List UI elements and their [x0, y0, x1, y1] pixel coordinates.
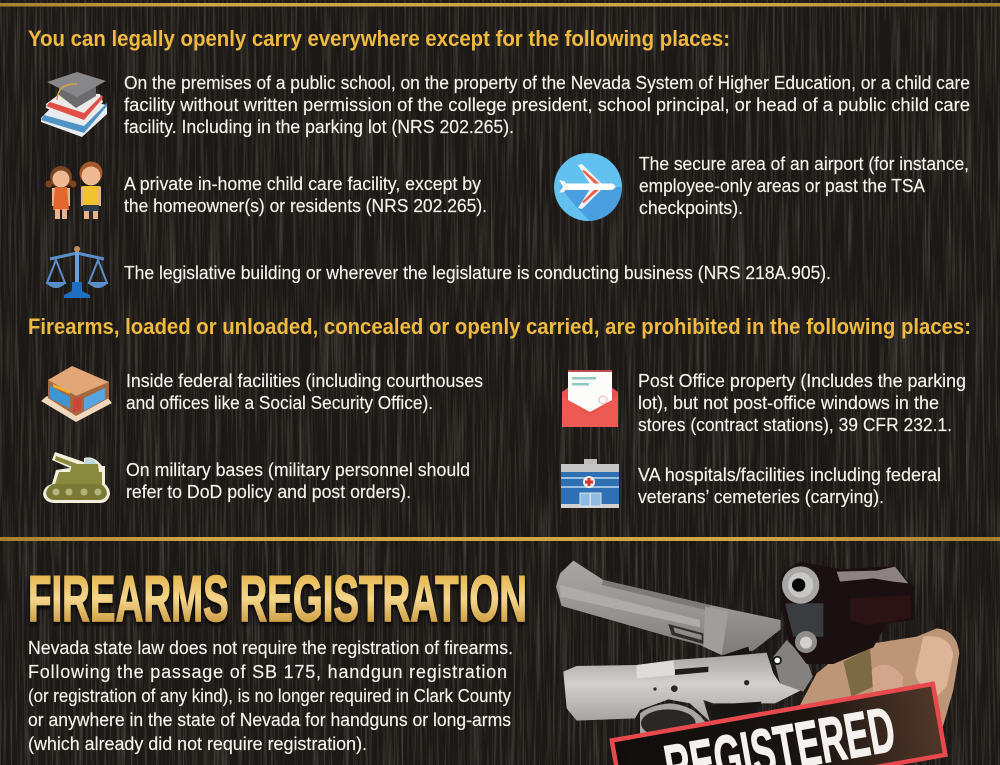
registered stamp [612, 684, 946, 765]
heading: open carry exceptions: You can legally openly carry everywhere except for the following places: [28, 26, 730, 51]
child care text: A private in-home child care facility, except by [124, 174, 481, 194]
federal facilities text [126, 371, 483, 413]
icon: tank [43, 452, 110, 503]
legislature text: The legislative building or wherever the legislature is conducting business (NRS 218A.905). [124, 263, 831, 283]
VA hospitals text [638, 465, 941, 507]
airport text: employee-only areas or past the TSA [639, 176, 925, 196]
finger and trigger guard [843, 648, 873, 697]
school text: On the premises of a public school, on the property of the Nevada System of Higher Education, or a child care [124, 73, 970, 93]
illustration: handguns with registered stamp [556, 561, 959, 765]
section gold divider [0, 537, 1000, 541]
airport text [639, 154, 969, 218]
icon: blue scales [46, 246, 108, 298]
post office text: stores (contract stations), 39 CFR 232.1. [638, 415, 952, 435]
school text: facility without written permission of the college president, school principal, or head of a public child care [124, 95, 970, 115]
icon: isometric building [41, 366, 112, 422]
military bases text: On military bases (military personnel should [126, 460, 470, 480]
military bases text: refer to DoD policy and post orders). [126, 482, 411, 502]
icon: hospital building [561, 459, 619, 508]
icon: graduation cap on books [41, 72, 107, 137]
item: child care [46, 162, 487, 219]
school text [124, 73, 970, 137]
silver pistol [563, 653, 802, 722]
post office text: Post Office property (Includes the parking [638, 371, 966, 391]
registration text block: (or registration of any kind), is no longer required in Clark County [28, 686, 511, 706]
registration text block: Following the passage of SB 175, handgun registration [28, 662, 507, 682]
top gold divider [0, 3, 1000, 6]
VA hospitals text: VA hospitals/facilities including federal [638, 465, 941, 485]
item: post office [562, 370, 966, 435]
child care text: the homeowner(s) or residents (NRS 202.265). [124, 196, 487, 216]
item: legislature [46, 246, 831, 298]
registration text block: Nevada state law does not require the registration of firearms. [28, 638, 513, 658]
airport text: checkpoints). [639, 198, 743, 218]
item: school [41, 72, 970, 137]
item: military bases [43, 452, 470, 503]
black pistol [781, 562, 914, 664]
registration text block: (which already did not require registration). [28, 734, 367, 754]
hand [800, 628, 960, 728]
military bases text [126, 460, 470, 502]
post office text [638, 371, 966, 435]
federal facilities text: and offices like a Social Security Office). [126, 393, 433, 413]
thumb highlight [915, 636, 953, 697]
VA hospitals text: veterans’ cemeteries (carrying). [638, 487, 884, 507]
icon: two children [46, 162, 102, 219]
item: airport [554, 153, 969, 221]
registration text block: or anywhere in the state of Nevada for handguns or long-arms [28, 710, 511, 730]
school text: facility. Including in the parking lot (NRS 202.265). [124, 117, 514, 137]
item: VA hospitals [561, 459, 941, 508]
icon: airplane in blue circle [554, 153, 622, 221]
federal facilities text: Inside federal facilities (including courthouses [126, 371, 483, 391]
child care text [124, 174, 487, 216]
post office text: lot), but not post-office windows in the [638, 393, 939, 413]
title: firearms registration: FIREARMS REGISTRATION [28, 562, 527, 635]
registration text block [28, 638, 513, 754]
guns and hand [556, 560, 960, 734]
airport text: The secure area of an airport (for instance, [639, 154, 969, 174]
revolver barrel [556, 561, 781, 655]
item: federal facilities [41, 366, 483, 422]
icon: envelope with letter [562, 370, 618, 427]
